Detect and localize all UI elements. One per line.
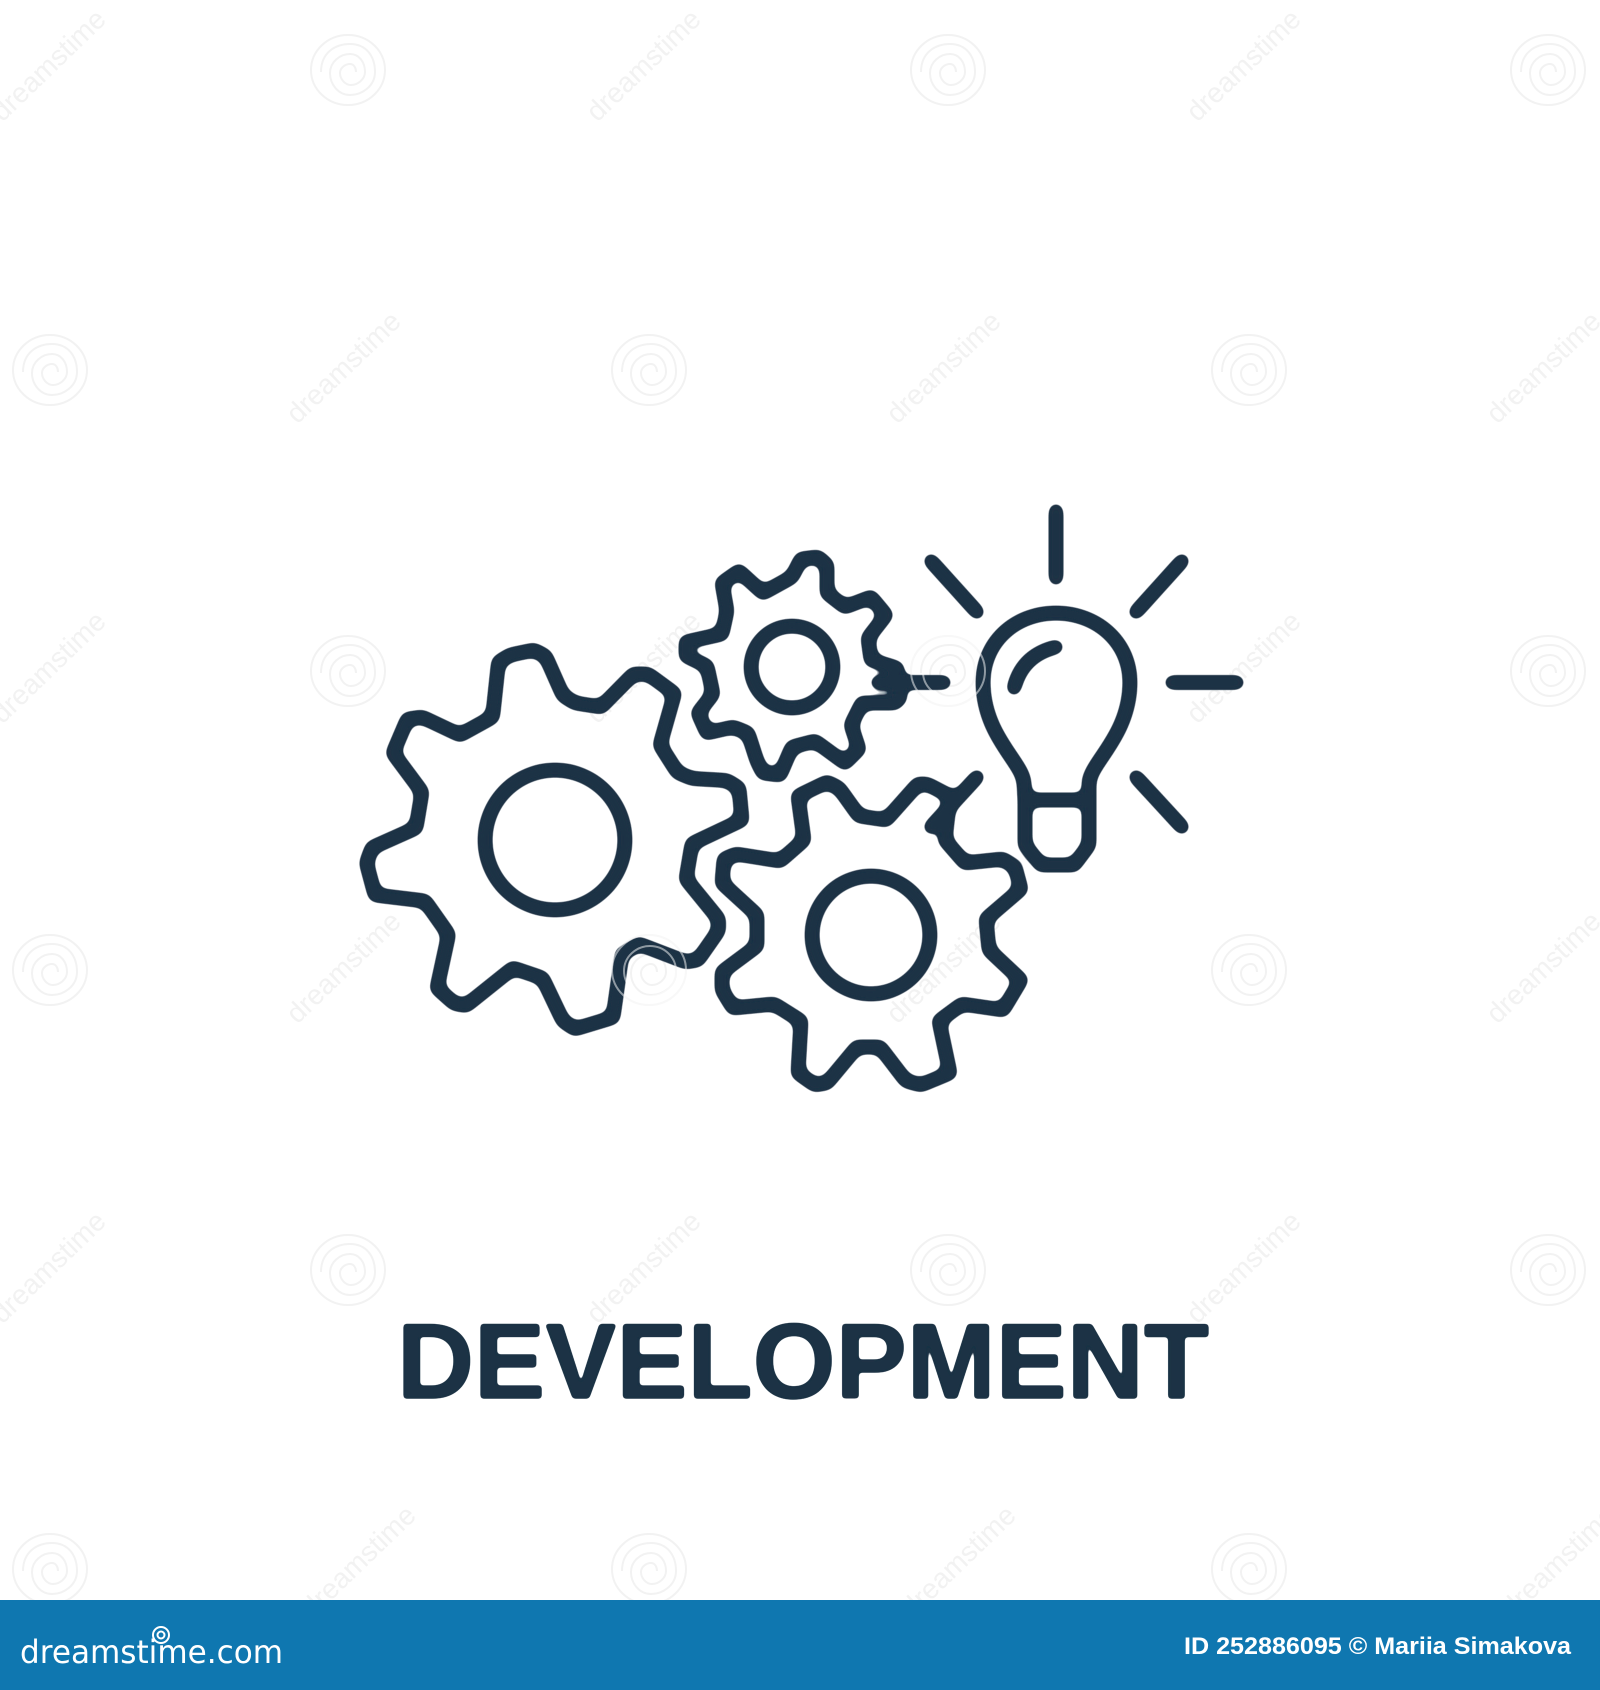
- watermark pattern: dreamstime: [1180, 3, 1307, 127]
- watermark pattern: dreamstime: [1180, 1205, 1307, 1329]
- icon: large gear: [366, 650, 742, 1029]
- icon: gears and light bulb: [366, 511, 1237, 1085]
- watermark pattern: dreamstime: [580, 605, 707, 729]
- watermark pattern: dreamstime: [880, 905, 1007, 1029]
- icon: small gear: [686, 557, 900, 775]
- footer logo: dreamstime.com: [20, 1633, 283, 1671]
- icon: light bulb: [983, 613, 1130, 865]
- watermark pattern: dreamstime: [280, 305, 407, 429]
- watermark pattern: dreamstime: [280, 905, 407, 1029]
- title: DEVELOPMENT: [397, 1301, 1209, 1421]
- icon: medium gear: [722, 782, 1021, 1085]
- watermark pattern: dreamstime: [1180, 605, 1307, 729]
- image credit: ID 252886095 © Mariia Simakova: [1184, 1633, 1572, 1660]
- watermark over icon: [612, 636, 985, 1005]
- watermark pattern: dreamstime: [895, 1499, 1022, 1623]
- watermark pattern: dreamstime: [580, 1205, 707, 1329]
- footer bar: [0, 1600, 1600, 1690]
- watermark pattern: dreamstime: [295, 1499, 422, 1623]
- watermark pattern: dreamstime: [880, 305, 1007, 429]
- icon: light rays: [878, 511, 1237, 827]
- watermark pattern: dreamstime: [580, 3, 707, 127]
